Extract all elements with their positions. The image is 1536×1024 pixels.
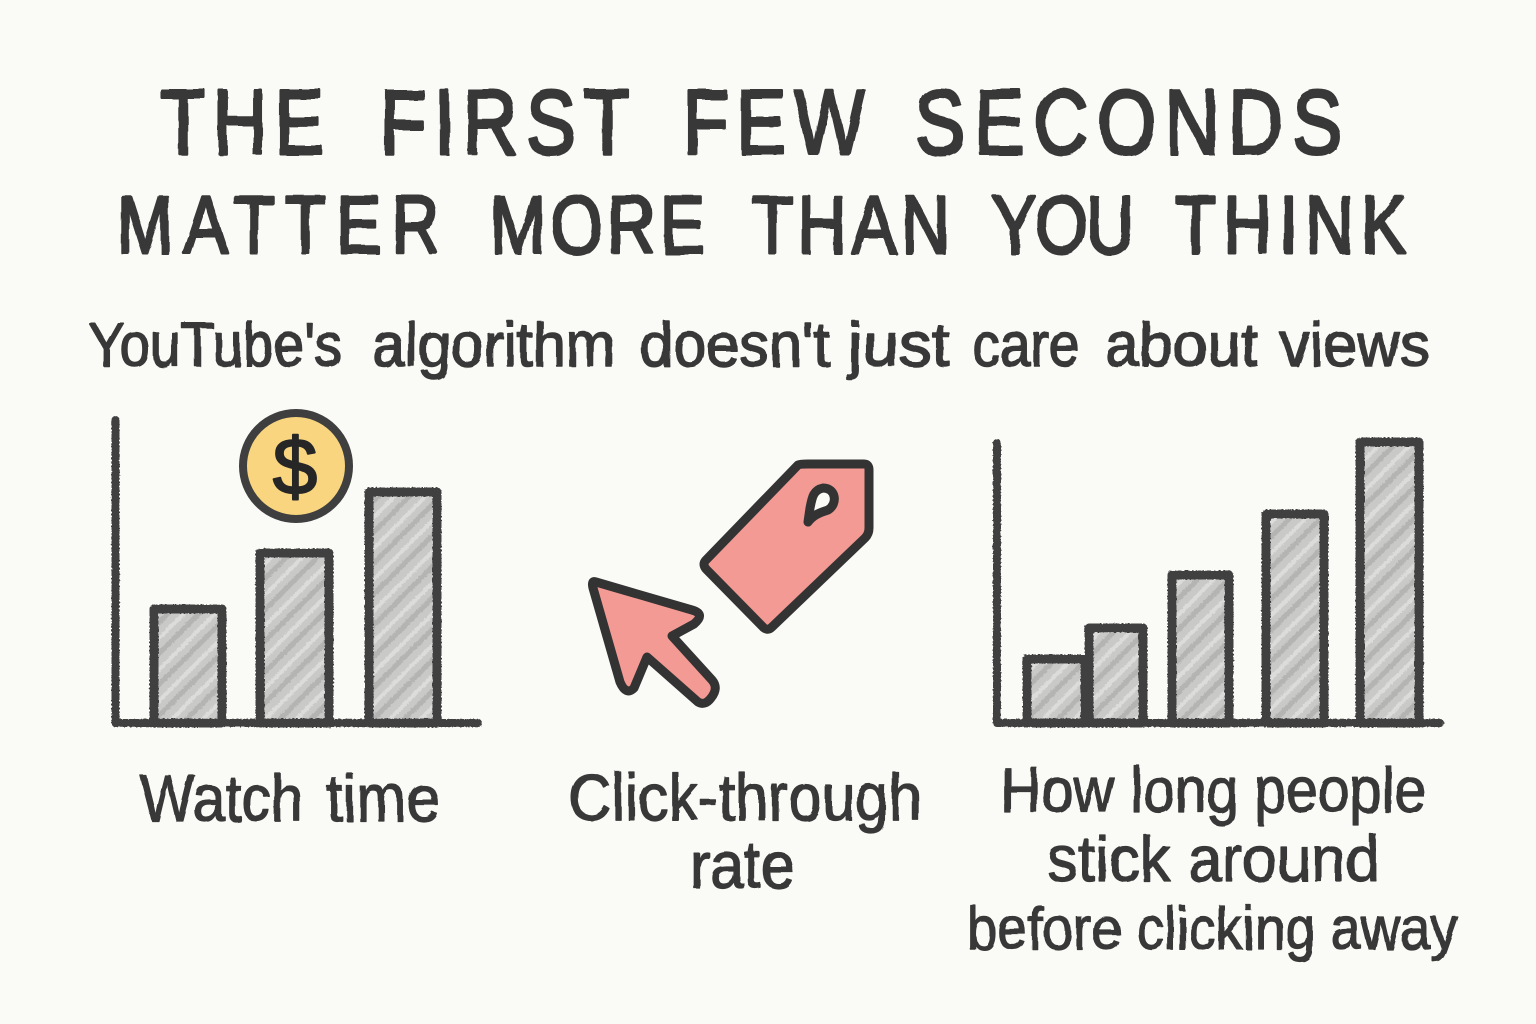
panel: click-through rate — [568, 464, 922, 902]
title line 1: THE — [160, 71, 325, 174]
title — [117, 71, 1406, 270]
title line 2: MORE — [490, 179, 705, 270]
subtitle: care — [972, 311, 1080, 380]
title line 2: MATTER — [117, 179, 440, 270]
subtitle: doesn't — [640, 311, 830, 380]
title line 1: FEW — [683, 71, 866, 174]
icon: dollar coin — [243, 413, 349, 519]
bar chart: watch time — [116, 420, 478, 723]
label: click-through rate: rate — [690, 828, 795, 902]
panel: watch time — [116, 413, 478, 835]
label: how long people stick around — [967, 754, 1458, 962]
label: click-through rate — [568, 760, 922, 902]
title line 2 — [117, 179, 1406, 270]
subtitle — [88, 311, 1430, 380]
label: watch time — [140, 761, 440, 835]
subtitle: algorithm — [372, 311, 615, 380]
label: how long people stick around: before clicking away — [967, 895, 1458, 962]
label: watch time: time — [326, 761, 440, 835]
icon: price tag — [704, 464, 869, 629]
label: watch time: Watch — [140, 761, 303, 835]
title line 1: FIRST — [380, 71, 630, 174]
panel: retention — [967, 442, 1458, 962]
label: click-through rate: Click-through — [568, 760, 922, 834]
label: how long people stick around: stick around — [1047, 823, 1380, 895]
bar chart: retention — [997, 442, 1440, 723]
subtitle: about — [1105, 311, 1258, 380]
subtitle: just — [846, 311, 950, 380]
title line 2: YOU — [992, 179, 1135, 270]
subtitle: YouTube's — [88, 311, 342, 380]
baseline — [576, 719, 895, 727]
title line 2: THAN — [752, 179, 950, 270]
title line 1: SECONDS — [915, 71, 1342, 174]
subtitle: views — [1280, 311, 1430, 380]
icon: dollar coin: $ — [273, 422, 317, 511]
title line 2: THINK — [1175, 179, 1406, 270]
label: how long people stick around: How long people — [1000, 754, 1426, 826]
icon: cursor arrow — [592, 582, 715, 703]
title line 1 — [160, 71, 1342, 174]
